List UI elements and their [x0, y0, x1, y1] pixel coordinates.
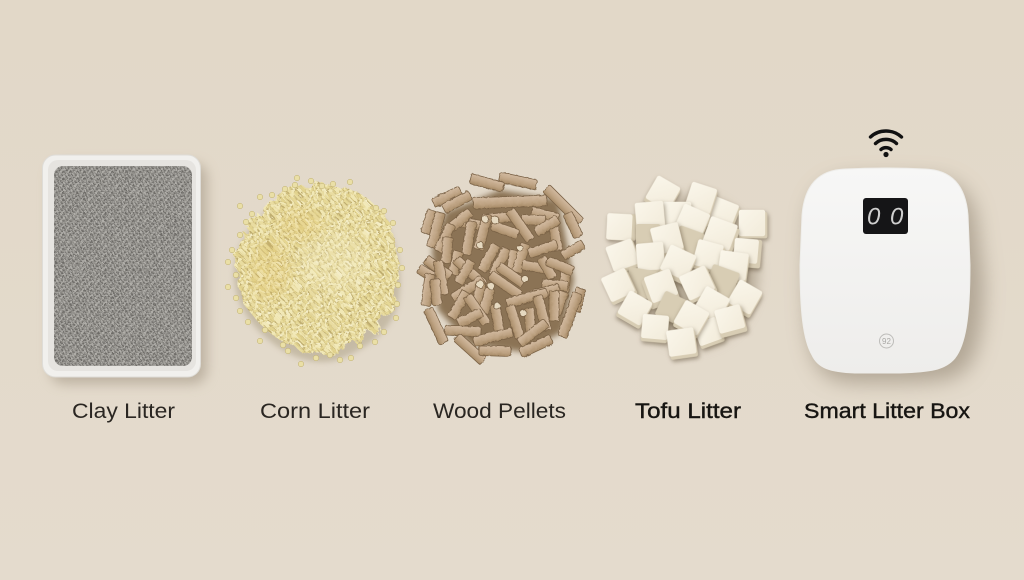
corn granules — [236, 184, 398, 354]
corn shading — [250, 209, 370, 300]
label: wood pellets: Wood Pellets — [433, 400, 566, 423]
label: clay litter: Clay Litter — [72, 400, 175, 423]
panel: wood pellets pile — [416, 172, 586, 365]
clay granules — [50, 162, 196, 370]
panel: clay litter tray — [42, 155, 207, 384]
logo mark — [880, 334, 894, 348]
icon: wifi — [870, 131, 902, 157]
logo mark: 92 — [882, 337, 891, 346]
label: smart litter box: Smart Litter Box — [804, 400, 971, 423]
panel: tofu litter cubes — [600, 175, 767, 360]
label: tofu litter: Tofu Litter — [635, 400, 741, 423]
label: corn litter: Corn Litter — [260, 400, 370, 423]
panel: smart litter box — [800, 131, 984, 383]
box body — [800, 168, 970, 373]
panel: corn litter pile — [225, 175, 405, 367]
digital display — [863, 198, 908, 234]
digital display: 00 — [867, 204, 904, 230]
scattered corn grains — [225, 175, 405, 367]
tofu cubes — [600, 175, 767, 360]
pellets — [416, 172, 586, 365]
